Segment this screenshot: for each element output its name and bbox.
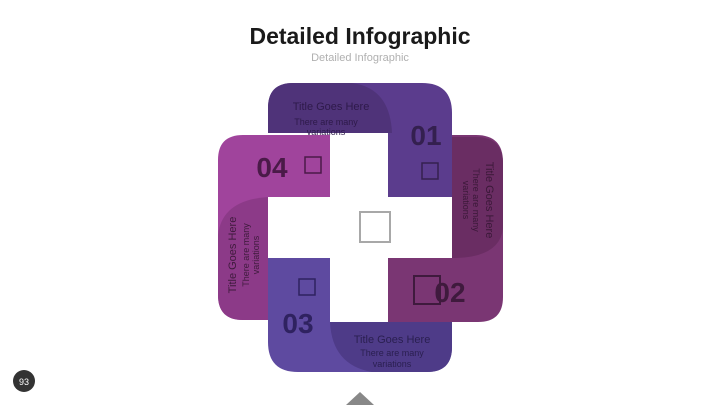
panel: 04: Title Goes Here (227, 217, 239, 293)
panel: 01: variations (307, 127, 346, 137)
panel: 04: 04 (256, 152, 288, 183)
panel: 01: Title Goes Here (293, 101, 369, 113)
panel: 03: 03 (282, 308, 314, 339)
panel: 02 (388, 135, 503, 322)
panel: 02: 02 (434, 277, 466, 308)
page number: 93 (19, 377, 29, 387)
panel: 02: Title Goes Here (483, 162, 495, 238)
panel: 03: There are many (360, 348, 424, 358)
panel: 01: 01 (410, 120, 442, 151)
panel: 03: variations (373, 359, 412, 369)
icon: center square (360, 212, 390, 242)
subtitle: Detailed Infographic (311, 52, 409, 64)
panel: 04: variations (251, 235, 261, 274)
title: Detailed Infographic (249, 23, 471, 49)
arrow: bottom triangle (346, 392, 374, 405)
panel: 04 (218, 135, 330, 320)
panel: 02: There are many (471, 168, 481, 232)
panel: 03 (268, 258, 452, 372)
panel: 01 (268, 83, 452, 197)
panel: 04: There are many (241, 223, 251, 287)
panel: 02: variations (461, 181, 471, 220)
panel: 03: Title Goes Here (354, 334, 430, 346)
page number (13, 370, 35, 392)
panel: 01: There are many (294, 117, 358, 127)
